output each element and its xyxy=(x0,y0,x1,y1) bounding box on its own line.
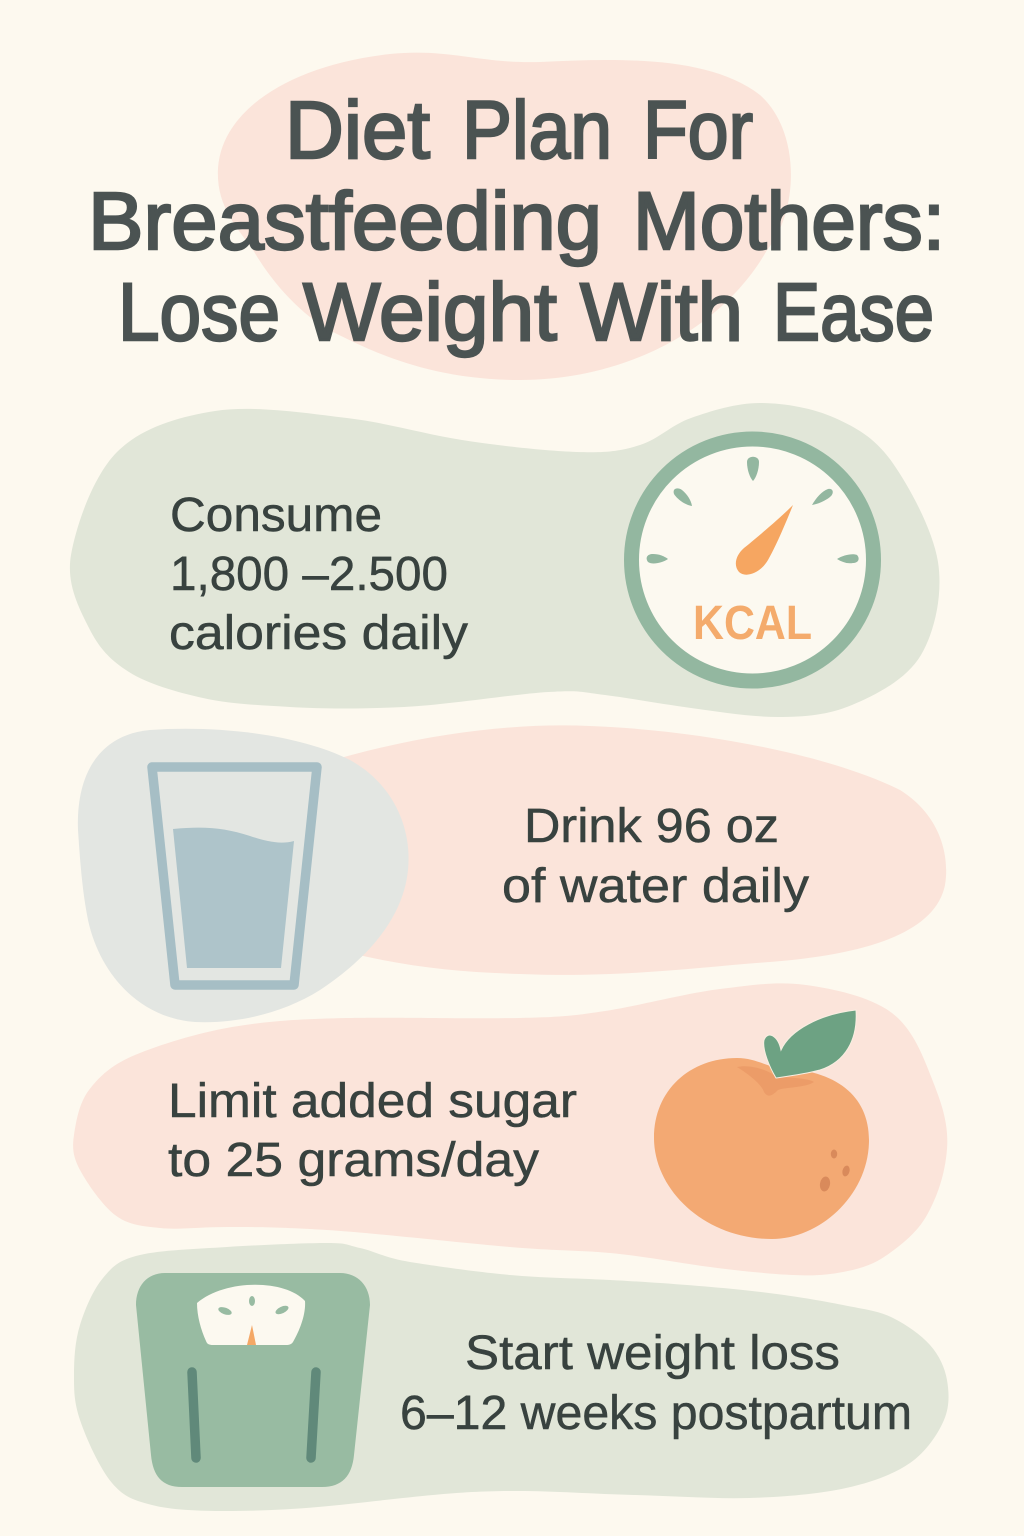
calories text: calories daily xyxy=(169,607,468,660)
icon: glass of water xyxy=(152,767,317,985)
title text: Plan xyxy=(462,85,612,176)
weight loss background blob xyxy=(74,1243,949,1511)
panel: water xyxy=(78,725,946,1022)
weight loss text xyxy=(400,1327,912,1440)
title text: Mothers: xyxy=(633,176,945,267)
title text: Ease xyxy=(773,267,934,358)
water text xyxy=(502,800,809,913)
panel: weight loss xyxy=(74,1243,949,1511)
title xyxy=(88,53,945,380)
sugar background blob xyxy=(73,983,947,1275)
weight loss text: Start weight loss xyxy=(465,1327,840,1380)
title text: For xyxy=(643,85,753,176)
scale dial xyxy=(197,1285,305,1345)
title background blob xyxy=(218,53,791,380)
title text: Weight xyxy=(303,267,557,358)
sugar text xyxy=(168,1075,577,1187)
sugar text: to 25 grams/day xyxy=(168,1134,539,1187)
title text: Lose xyxy=(118,267,280,358)
icon: kcal gauge xyxy=(632,439,874,681)
sugar text: Limit added sugar xyxy=(168,1075,577,1128)
water text: of water daily xyxy=(502,860,809,913)
panel: sugar xyxy=(73,983,947,1275)
KCAL label: KCAL xyxy=(693,597,812,650)
calories text xyxy=(169,489,468,660)
water background blob xyxy=(300,725,946,975)
gauge needle xyxy=(736,505,793,575)
title text: Breastfeeding xyxy=(88,176,602,267)
calories text: Consume xyxy=(170,489,382,542)
water text: Drink 96 oz xyxy=(524,800,779,853)
weight loss text: 6–12 weeks postpartum xyxy=(400,1387,912,1440)
title text xyxy=(88,85,945,358)
calories text: 1,800 –2.500 xyxy=(170,548,448,601)
scale bars xyxy=(192,1372,196,1458)
panel: calories xyxy=(70,403,939,717)
icon: bathroom scale xyxy=(136,1273,370,1487)
title text: With xyxy=(580,267,743,358)
calories background blob xyxy=(70,403,939,717)
title text: Diet xyxy=(285,85,430,176)
icon: orange xyxy=(654,1010,869,1239)
water icon background blob xyxy=(78,729,409,1022)
